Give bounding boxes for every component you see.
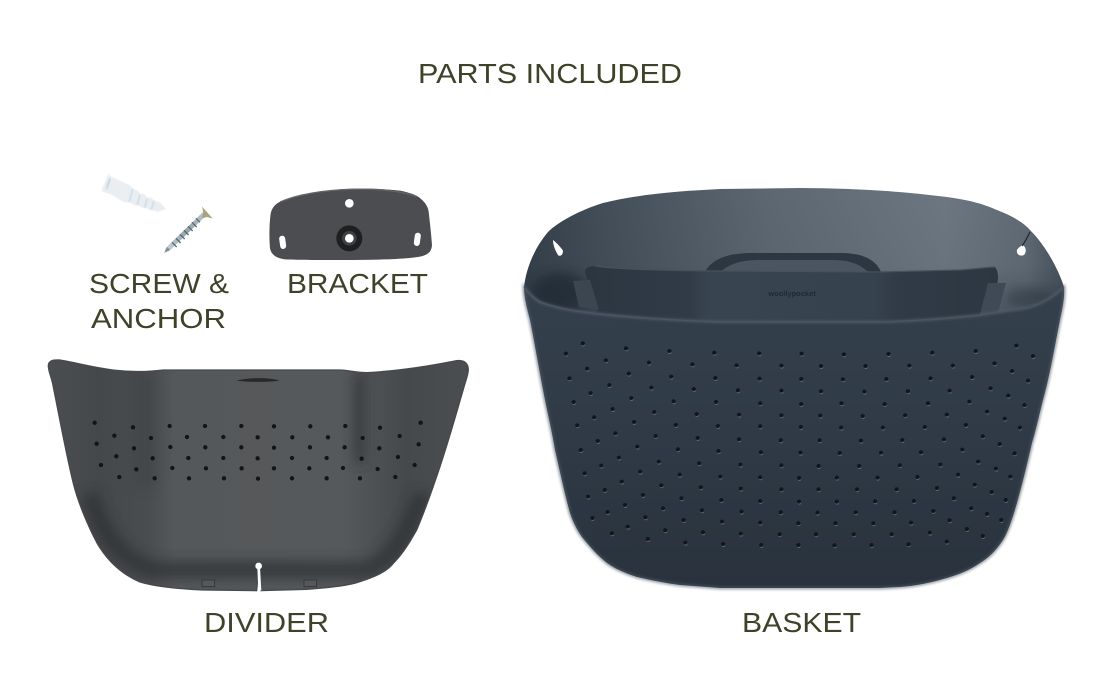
label: bracket: BRACKET bbox=[287, 268, 428, 299]
inner divider bbox=[573, 266, 1006, 322]
divider fold shading bbox=[90, 373, 423, 570]
basket front body bbox=[524, 287, 1064, 588]
divider slot bbox=[237, 378, 279, 382]
divider holes bbox=[95, 423, 421, 479]
title: PARTS INCLUDED bbox=[418, 58, 682, 89]
label: screw and anchor: ANCHOR bbox=[91, 303, 226, 334]
basket part bbox=[524, 188, 1064, 588]
divider bottom clips bbox=[202, 580, 317, 587]
infographic canvas bbox=[48, 64, 1068, 632]
basket back wall bbox=[524, 188, 1064, 330]
label: divider: DIVIDER bbox=[204, 607, 329, 638]
label: screw and anchor: SCREW & bbox=[89, 268, 229, 299]
basket drainage holes bbox=[566, 343, 1033, 547]
icon: wall anchor bbox=[101, 174, 166, 212]
divider part bbox=[48, 360, 468, 591]
label: screw and anchor bbox=[89, 268, 229, 334]
label: basket: BASKET bbox=[742, 607, 861, 638]
keyhole left bbox=[553, 240, 563, 256]
bracket seen inside basket bbox=[705, 253, 881, 272]
icon: bracket bbox=[269, 189, 432, 260]
divider centre notch bbox=[255, 563, 262, 591]
icon: screw bbox=[164, 207, 213, 253]
keyhole right bbox=[1017, 232, 1030, 256]
inner divider: woollypocket bbox=[767, 289, 816, 298]
